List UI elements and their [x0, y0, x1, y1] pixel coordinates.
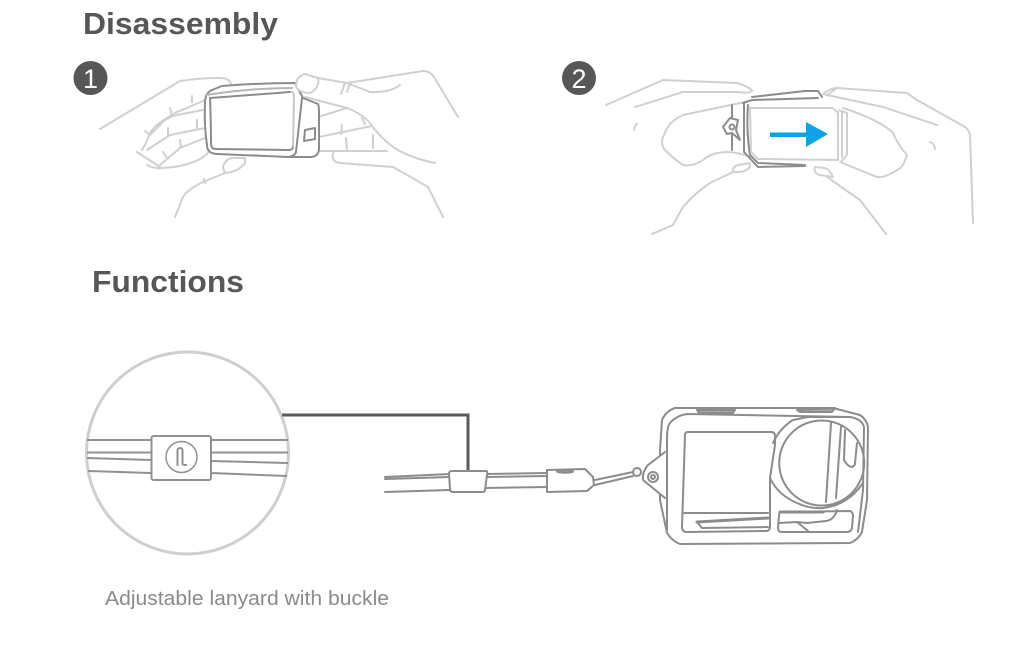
- buckle: [152, 436, 211, 480]
- lanyard cords: [87, 440, 288, 476]
- arrow: slide right: [770, 122, 828, 147]
- lower right slot: [778, 511, 853, 532]
- buckle 1: [449, 471, 487, 492]
- caption: Adjustable lanyard with buckle: [105, 588, 389, 610]
- step 1 badge: [74, 61, 108, 95]
- hands outline: [606, 80, 973, 234]
- camera frame: [723, 91, 822, 167]
- finger tips: [733, 83, 837, 177]
- right hand: [305, 71, 458, 217]
- right thumb: [296, 74, 318, 93]
- buckle logo: [166, 442, 197, 472]
- left thumb: [175, 158, 245, 217]
- screen: [682, 432, 775, 532]
- step 2 badge: [562, 61, 596, 95]
- lanyard: [385, 469, 633, 492]
- step 1 badge: 1: [83, 64, 98, 94]
- frame outline: [660, 408, 868, 544]
- heading: Functions: Functions: [92, 264, 244, 299]
- lens ring: [779, 420, 864, 506]
- left hand: [100, 78, 231, 168]
- step 2 badge: 2: [571, 64, 587, 94]
- buckle 2: [547, 469, 594, 492]
- magnified view: lanyard buckle: [86, 352, 288, 554]
- camera body: [205, 83, 319, 157]
- callout leader line: [282, 415, 468, 472]
- heading: Disassembly: Disassembly: [83, 6, 279, 41]
- illustration: step 2 hands sliding camera: [606, 80, 973, 234]
- illustration: step 1 hands holding camera: [100, 71, 458, 217]
- lanyard lug: [643, 452, 665, 498]
- camera with protective frame: [633, 408, 868, 544]
- sliding screen: [750, 108, 847, 163]
